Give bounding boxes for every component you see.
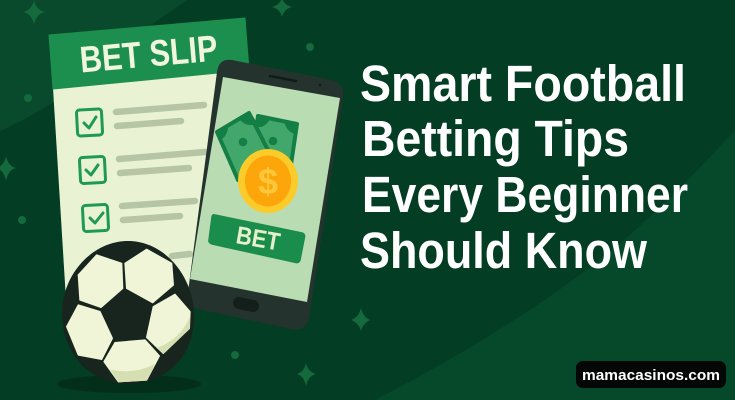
title: Betting Tips bbox=[362, 110, 629, 167]
bet slip bbox=[49, 18, 249, 300]
banknotes bbox=[216, 112, 297, 185]
coin bbox=[238, 149, 298, 213]
title: Every Beginner bbox=[362, 166, 688, 223]
title bbox=[360, 55, 688, 279]
title: Smart Football bbox=[360, 55, 686, 112]
bet button: BET bbox=[234, 221, 282, 257]
sparkles and dots bbox=[0, 0, 370, 386]
slip heading: BET SLIP bbox=[78, 28, 219, 80]
website badge: mamacasinos.com bbox=[582, 367, 720, 384]
website badge bbox=[576, 361, 726, 388]
football bbox=[62, 241, 194, 384]
slip header bbox=[49, 18, 249, 89]
phone screen bbox=[190, 77, 340, 302]
ball shadow bbox=[57, 375, 201, 393]
home button bbox=[239, 303, 253, 306]
coin: $ bbox=[258, 161, 278, 202]
phone bbox=[188, 60, 343, 330]
bet button bbox=[209, 215, 305, 263]
checklist rows bbox=[76, 105, 205, 256]
title: Should Know bbox=[360, 222, 647, 279]
phone speaker bbox=[270, 76, 296, 81]
